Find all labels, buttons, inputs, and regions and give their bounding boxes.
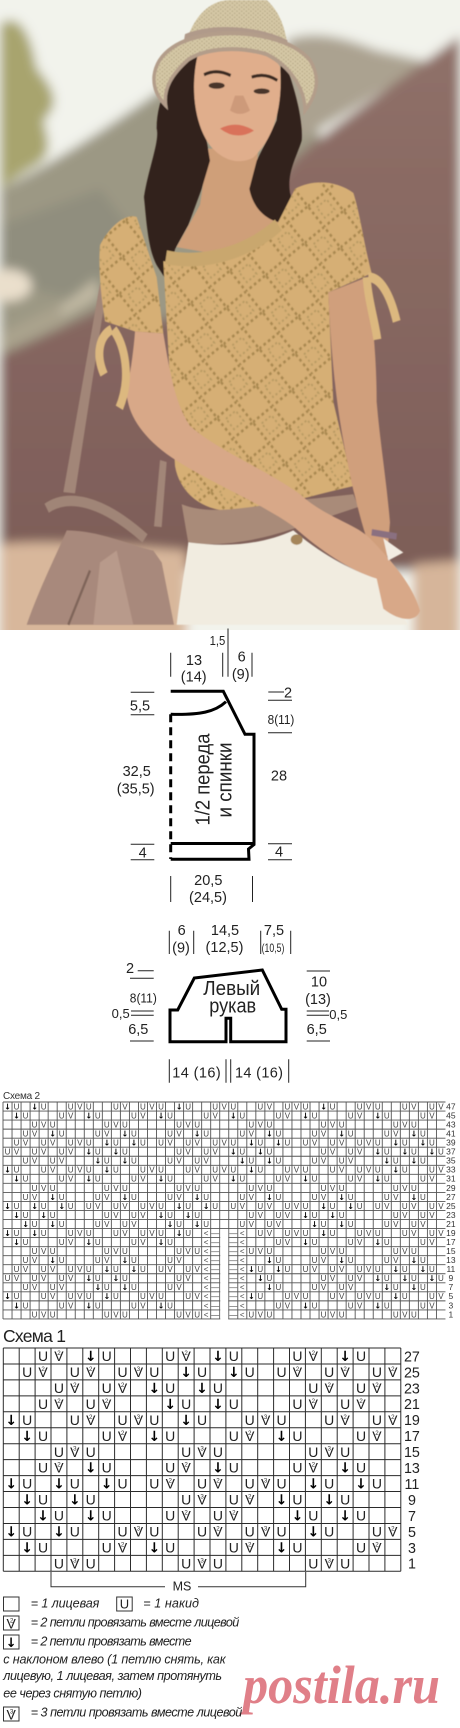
chart: Схема 1: 222	[121, 1430, 379, 1437]
chart: Схема 1: 21	[404, 1397, 420, 1413]
chart: Схема 1: 32	[200, 1494, 252, 1501]
sleeve dimension numbers: (10,5)	[262, 941, 284, 955]
sleeve label	[203, 978, 260, 1018]
chart: Схема 2: 21	[446, 1219, 456, 1229]
chart: Схема 1: 223222	[41, 1366, 395, 1373]
chart: Схема 1: 3232	[137, 1525, 395, 1532]
legend item: 2 together: = 2 петли провязать вместе лицевой	[31, 1616, 239, 1630]
chart: Схема 2: ↓ U ↓ UUVUUVUVU ↓ U<——<UVUVU ↓ UUVUUVUV	[4, 1229, 444, 1238]
chart: Схема 1: ↓ UUV ↓ UUV ↓ UUV	[21, 1539, 382, 1556]
chart: Схема 2: UVUVUVU ↓ U ↓ UUVUV<——< ↓ U ↓ UUVUVUVU ↓ U ↓ U	[14, 1265, 435, 1274]
chart: Схема 1: UV ↓ UUV ↓ UUV ↓ U	[38, 1348, 366, 1365]
dimension numbers: 32,5	[123, 764, 151, 780]
dimension numbers	[117, 633, 294, 906]
chart: Схема 2: UVUV ↓ U ↓ UUVUV ↓ U ↓ UUVUV ↓ U ↓ U	[23, 1157, 426, 1166]
sleeve dimension numbers: 0,5	[329, 1007, 347, 1022]
chart: Схема 2: UVUUVUUVUUVUUVUUVU	[32, 1120, 417, 1129]
chart: Схема 2: 33	[446, 1165, 456, 1175]
chart: Схема 2: 25	[446, 1201, 456, 1211]
chart: Схема 2: UVUUVUUVU<——<UVUUVUUVU	[32, 1247, 417, 1256]
legend item: 3 together: V	[7, 1706, 17, 1722]
chart: Схема 2: 17	[446, 1237, 456, 1247]
watermark: postila.ru: postila.ru	[239, 1655, 440, 1715]
chart: Схема 2: 9	[449, 1273, 454, 1283]
sleeve label: Левый	[203, 978, 260, 1000]
chart: Схема 2: UVUV ↓ U ↓ UUV<——< ↓ UUVUV ↓ U ↓ U	[23, 1283, 426, 1292]
chart: Схема 2: 1	[449, 1309, 454, 1319]
legend item: knit	[4, 1597, 100, 1611]
chart: Схема 2: 3	[449, 1300, 454, 1310]
chart: Схема 1: ↓ U ↓ UUVUV ↓ U ↓ U	[21, 1492, 350, 1509]
dimension numbers: (14)	[181, 670, 207, 686]
dimension numbers: (35,5)	[117, 781, 155, 797]
heading: Схема 2: Схема 2	[3, 1091, 40, 1102]
chart: Схема 1: 2222	[57, 1398, 363, 1405]
chart: Схема 1: 222	[57, 1462, 316, 1469]
chart: Схема 1: 17	[404, 1429, 420, 1445]
photo: model in lace sweater and straw hat	[0, 0, 460, 630]
chart: Схема 2: ↓ UUVUVU ↓ UUVUUV<——< ↓ UUVUUVUVU ↓ UUV	[4, 1292, 444, 1301]
rotated label: 1/2 переда и спинки	[192, 733, 236, 826]
sleeve dimension numbers: 2	[126, 961, 134, 977]
chart: Схема 1: 15	[404, 1445, 420, 1461]
chart: Схема 2: ↓ U ↓ UUVUV ↓ U ↓ UUVUV ↓ U ↓ UUVUV	[13, 1211, 435, 1220]
sleeve dimension numbers: 6	[178, 923, 186, 939]
chart: Схема 1: UVUVUVU ↓ U ↓ UUVUVUV	[22, 1364, 398, 1381]
sleeve dimension numbers: 6,5	[307, 1022, 327, 1038]
chart: Схема 2	[3, 1101, 456, 1320]
legend item: 2 together left slant: ↓	[6, 1636, 17, 1651]
chart: Схема 1: 19	[404, 1413, 420, 1429]
chart: Схема 1: 7	[408, 1509, 416, 1525]
chart: Схема 1: UV ↓ UUV ↓ UUV ↓ U	[38, 1460, 366, 1477]
chart: Схема 1: UVUV ↓ U ↓ UUVUV	[38, 1396, 366, 1413]
chart: Схема 1: ↓ UUV ↓ UUV ↓ UUV	[21, 1428, 382, 1445]
bracket: MS pattern repeat	[51, 1572, 306, 1594]
photo background: sky and hills	[0, 0, 460, 659]
chart: Схема 2: ↓ UUV ↓ UUV ↓ UUV ↓ UUV ↓ UUV ↓ UUV	[13, 1175, 435, 1184]
legend	[2, 1596, 242, 1722]
schematic: left sleeve	[112, 923, 347, 1083]
sleeve dimension numbers: 10	[311, 975, 327, 991]
chart: Схема 1: 9	[408, 1493, 416, 1509]
sleeve outline	[170, 970, 286, 1042]
chart: Схема 2: UV ↓ UUV ↓ UUV<——< ↓ UUV ↓ UUV ↓ U	[23, 1256, 426, 1265]
dimension numbers: 4	[139, 846, 147, 862]
sleeve dimension numbers: 6,5	[128, 1022, 148, 1038]
dimension ticks and lines	[131, 628, 292, 902]
chart: Схема 2: 13	[446, 1255, 456, 1265]
chart: Схема 1: UVUUVUUVU	[54, 1555, 350, 1571]
chart: Схема 2: ↓ U ↓ UUVUV ↓ U ↓ UUVUV ↓ U ↓ UUVUV	[22, 1220, 426, 1229]
legend item: 3 together: = 3 петли провязать вместе лицевой	[31, 1706, 242, 1720]
bracket: MS pattern repeat: MS	[173, 1580, 191, 1594]
dimension numbers: 28	[271, 769, 287, 785]
chart: Схема 1: 23322	[89, 1414, 395, 1421]
chart: Схема 1: 223	[169, 1478, 268, 1485]
chart: Схема 2: 41	[446, 1129, 456, 1139]
rotated label: 1/2 переда и спинки: и спинки	[214, 742, 236, 818]
legend item: 2 together left slant: ее через снятую петлю)	[3, 1686, 142, 1700]
chart: Схема 2: UV ↓ UUV ↓ UUV ↓ UUV ↓ UUV ↓ UUV ↓ U	[23, 1130, 426, 1139]
chart: Схема 2: UVUUVUUVUUVUUVUUVU	[32, 1184, 417, 1193]
chart: Схема 1: 333	[73, 1557, 332, 1564]
dimension numbers: 2	[284, 686, 292, 702]
chart: Схема 2: UVUVUV ↓ U ↓ UUV<——< ↓ UUVUV ↓ U ↓ U ↓ U	[5, 1274, 444, 1283]
chart: Схема 2: 19	[446, 1228, 456, 1238]
chart: Схема 2: 11	[446, 1264, 456, 1274]
sleeve dimension numbers: 14,5	[211, 923, 239, 939]
dimension numbers: 5,5	[130, 699, 150, 715]
legend item: yarn over	[117, 1596, 199, 1612]
chart: Схема 1: UVUV ↓ U ↓ UUVUV	[54, 1380, 382, 1397]
chart: Схема 1: 1	[408, 1557, 416, 1573]
dimension numbers: 6	[238, 650, 246, 666]
chart: Схема 1	[3, 1348, 420, 1573]
heading: Схема 1: Схема 1	[3, 1326, 66, 1346]
dimension numbers: 20,5	[194, 873, 222, 889]
dimension numbers: 8(11)	[268, 712, 294, 727]
legend item: 2 together: V	[7, 1616, 17, 1632]
chart: Схема 2: 39	[446, 1138, 456, 1148]
schematic: front and back half	[117, 628, 294, 906]
chart: Схема 1: ↓ U ↓ UUVUUVUVU ↓ UUV	[5, 1524, 398, 1541]
chart: Схема 1: 2222	[73, 1382, 379, 1389]
sleeve dimension numbers	[112, 923, 347, 1081]
chart: Схема 2: 45	[446, 1110, 456, 1120]
chart: Схема 1: UVUUVUUVU	[54, 1444, 350, 1460]
chart: Схема 1: ↓ U ↓ UUVUV ↓ U ↓ U	[37, 1508, 366, 1525]
chart: Схема 2: UVUUVUUVU<——<UVUUVUUVU	[32, 1310, 417, 1319]
chart: Схема 2: 23	[446, 1210, 456, 1220]
chart: Схема 2: UVUVUV ↓ U ↓ UUVUV ↓ U ↓ UUVUV ↓ U ↓ U ↓ U	[5, 1148, 444, 1157]
sleeve dimension numbers: 14 (16)	[235, 1065, 283, 1081]
chart: Схема 2: ↓ UUV ↓ UUV ↓ U<——<UV ↓ UUV ↓ UUV	[13, 1301, 435, 1310]
chart: Схема 2: ↓ UUV ↓ UUV ↓ U<——<UV ↓ UUV ↓ UUV	[13, 1238, 435, 1247]
legend item: 2 together left slant: лицевую, 1 лицевая, затем протянуть	[2, 1669, 222, 1683]
chart: Схема 2: 5	[449, 1291, 454, 1301]
legend item: yarn over: U	[120, 1596, 129, 1612]
chart: Схема 2: ↓ UUV ↓ UUV ↓ UUV ↓ UUV ↓ UUV ↓ UUV	[13, 1111, 435, 1120]
chart: Схема 2: UVUVUVU ↓ U ↓ UUVUVUVU ↓ U ↓ UUVUVUVU ↓ U ↓ U	[14, 1139, 435, 1148]
legend item: 2 together left slant: с наклоном влево (1 петлю снять, как	[3, 1652, 227, 1666]
legend item: 3 together: 3	[10, 1710, 14, 1716]
legend item: yarn over: = 1 накид	[143, 1597, 199, 1611]
sleeve dimension numbers: (13)	[305, 992, 331, 1008]
chart: Схема 1: 13	[404, 1461, 420, 1477]
sleeve dimension lines	[130, 931, 330, 1083]
chart: Схема 2: 27	[446, 1192, 456, 1202]
chart: Схема 2: 35	[446, 1156, 456, 1166]
chart: Схема 2: 37	[446, 1147, 456, 1157]
dimension numbers: (9)	[232, 667, 250, 683]
chart: Схема 2: 47	[446, 1101, 456, 1111]
chart: Схема 1: 222	[121, 1541, 379, 1548]
chart: Схема 2: 29	[446, 1183, 456, 1193]
dimension numbers: (24,5)	[189, 890, 227, 906]
dimension numbers: 1,5	[210, 633, 225, 648]
chart: Схема 1: ↓ UUVUVU ↓ UUVUUVUV	[5, 1412, 398, 1429]
photo subject	[27, 0, 420, 625]
chart: Схема 2: ↓ U ↓ UUVUUVUVU ↓ UUVUUVUVU ↓ UUVUUVUV	[4, 1102, 444, 1111]
chart: Схема 1: 222	[57, 1350, 316, 1357]
legend item: 2 together left slant	[2, 1635, 227, 1700]
chart: Схема 2: ↓ UUVUVU ↓ UUVUUVUVU ↓ UUVUUVUVU ↓ UUV	[4, 1166, 444, 1175]
sleeve dimension numbers: 0,5	[112, 1006, 130, 1021]
chart: Схема 2: ↓ U ↓ U ↓ UUVUVUVU ↓ U ↓ UUVUVUVU ↓ U ↓ UUVUVUV	[4, 1202, 444, 1211]
legend item: 2 together left slant: = 2 петли провязать вместе	[31, 1635, 192, 1649]
rotated label: 1/2 переда и спинки: 1/2 переда	[192, 733, 214, 826]
sleeve dimension numbers: 7,5	[264, 923, 284, 939]
chart: Схема 1: 3	[408, 1541, 416, 1557]
legend item: 2 together: 2	[10, 1618, 14, 1624]
chart: Схема 2: UV ↓ UUV ↓ UUV ↓ UUV ↓ UUV ↓ UUV ↓ U	[23, 1193, 426, 1202]
chart: Схема 1: 11	[405, 1477, 419, 1493]
chart: Схема 2: 43	[446, 1119, 456, 1129]
sleeve label: рукав	[209, 996, 256, 1018]
dimension numbers: 4	[275, 845, 283, 861]
chart: Схема 1: 27	[404, 1349, 420, 1365]
legend item: knit: = 1 лицевая	[31, 1597, 100, 1611]
sweater outline	[171, 691, 254, 859]
sleeve dimension numbers: (9)	[172, 940, 190, 956]
chart: Схема 1: 333	[73, 1446, 332, 1453]
chart: Схема 1: 22	[184, 1510, 236, 1517]
sleeve dimension numbers: 8(11)	[130, 990, 157, 1005]
chart: Схема 1: 5	[408, 1525, 416, 1541]
chart: Схема 1: 23	[404, 1381, 420, 1397]
dimension numbers: 13	[186, 653, 202, 669]
chart: Схема 2: 31	[446, 1174, 456, 1184]
sleeve dimension numbers: 14 (16)	[172, 1065, 221, 1081]
sleeve dimension numbers: (12,5)	[206, 940, 243, 956]
chart: Схема 1: ↓ U ↓ U ↓ UUVUVUVU ↓ U ↓ U	[5, 1476, 382, 1493]
chart: Схема 1: 25	[404, 1365, 420, 1381]
chart: Схема 2: 15	[446, 1246, 456, 1256]
chart: Схема 2: 7	[449, 1282, 454, 1292]
